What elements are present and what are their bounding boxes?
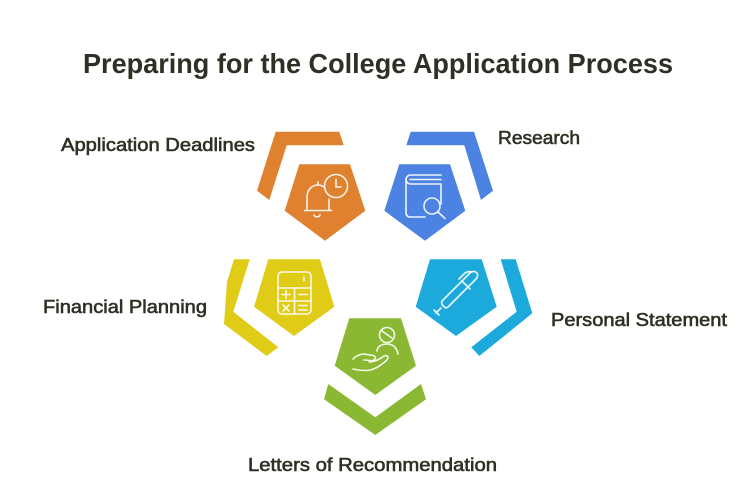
label: personal statement: Personal Statement bbox=[551, 309, 727, 330]
cyan pentagon bbox=[416, 259, 497, 336]
segment: letters of recommendation bbox=[248, 318, 497, 475]
icon: hand and person bbox=[353, 328, 398, 370]
orange chevron bbox=[257, 132, 344, 200]
blue chevron bbox=[406, 132, 493, 200]
label: application deadlines: Application Deadlines bbox=[61, 134, 255, 155]
label: research: Research bbox=[498, 127, 580, 148]
segment: application deadlines bbox=[61, 132, 365, 241]
segment: financial planning bbox=[43, 259, 334, 356]
icon: calculator bbox=[278, 272, 311, 314]
segment: research bbox=[384, 127, 580, 241]
blue pentagon bbox=[384, 164, 465, 241]
segment: personal statement bbox=[416, 259, 727, 356]
yellow pentagon bbox=[254, 259, 334, 336]
icon: bell and clock bbox=[304, 174, 348, 217]
cyan chevron bbox=[471, 259, 532, 356]
orange pentagon bbox=[285, 164, 365, 241]
green pentagon bbox=[335, 318, 416, 395]
title: Preparing for the College Application Process bbox=[83, 48, 673, 79]
yellow chevron bbox=[224, 259, 278, 356]
icon: pen bbox=[434, 271, 478, 315]
green chevron bbox=[324, 384, 426, 435]
label: financial planning: Financial Planning bbox=[43, 296, 207, 317]
icon: book and magnifier bbox=[406, 175, 445, 218]
label: letters of recommendation: Letters of Recommendation bbox=[248, 454, 497, 475]
